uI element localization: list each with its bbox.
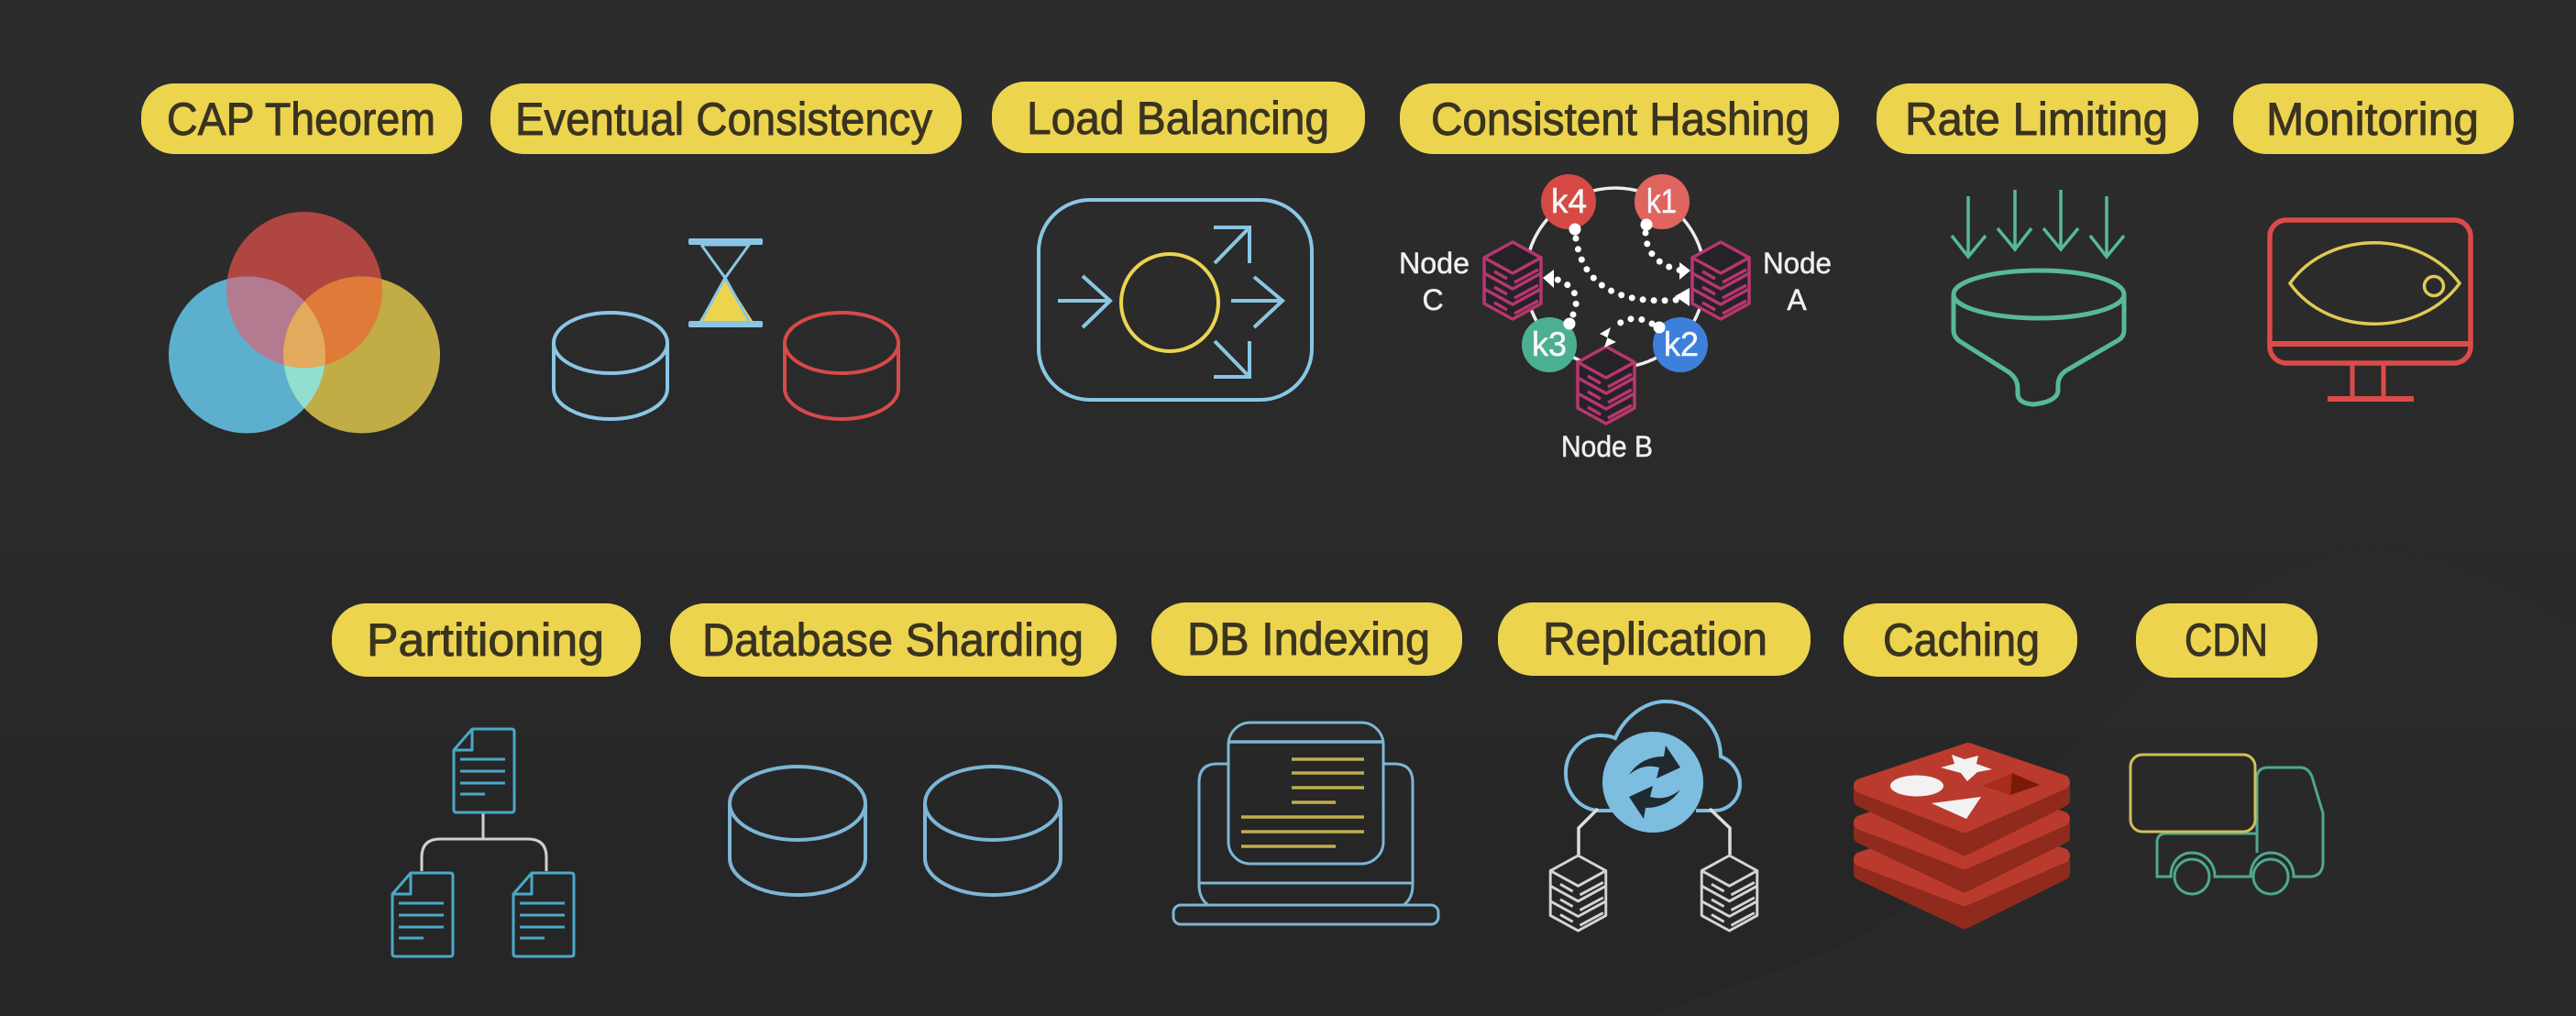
panel: Database Sharding	[670, 603, 1117, 895]
heading: Database Sharding: Database Sharding	[702, 614, 1084, 666]
panel: Caching	[1844, 603, 2077, 922]
icon: left server	[1550, 856, 1606, 931]
panel: Replication	[1498, 602, 1811, 931]
icon: two database shards	[730, 767, 1061, 895]
diagram: hash ring	[1399, 174, 1832, 463]
panel: Load Balancing	[992, 82, 1365, 400]
heading: DB Indexing	[1151, 602, 1462, 676]
icon: document tree	[392, 729, 574, 956]
server: Node B	[1578, 347, 1635, 424]
arrow: k4 to Node A	[1569, 224, 1690, 306]
panel: DB Indexing	[1151, 602, 1462, 924]
icon: load balancer	[1039, 200, 1312, 400]
icon: down arrows	[1952, 190, 2124, 257]
panel: Eventual Consistency	[490, 83, 962, 419]
key: k1	[1635, 174, 1690, 229]
heading: Consistent Hashing	[1400, 83, 1839, 154]
heading: Load Balancing: Load Balancing	[1027, 93, 1329, 144]
heading: Monitoring	[2233, 83, 2514, 154]
heading: Load Balancing	[992, 82, 1365, 153]
heading: CDN	[2136, 603, 2317, 678]
icon: hourglass	[688, 238, 763, 327]
heading: CDN: CDN	[2185, 614, 2268, 666]
arrow: k3 to Node C	[1543, 270, 1576, 330]
panel: CAP Theorem	[141, 83, 462, 433]
heading: Replication	[1498, 602, 1811, 676]
heading: CAP Theorem: CAP Theorem	[167, 94, 435, 145]
panel: Partitioning	[332, 603, 641, 956]
label: Node A: Node	[1763, 247, 1832, 280]
key: k2: k2	[1664, 326, 1699, 363]
server: Node C	[1484, 242, 1541, 319]
heading: Eventual Consistency: Eventual Consistency	[515, 94, 932, 145]
heading: Caching: Caching	[1883, 614, 2040, 666]
icon: monitor	[2270, 220, 2471, 402]
server: Node A	[1692, 242, 1749, 319]
heading: Rate Limiting: Rate Limiting	[1905, 94, 2168, 145]
arrow: k2 to Node B	[1600, 319, 1665, 348]
icon: delivery truck	[2130, 755, 2323, 894]
heading: Consistent Hashing: Consistent Hashing	[1431, 94, 1810, 145]
panel: Monitoring	[2233, 83, 2514, 402]
label: Node A: A	[1787, 283, 1807, 316]
icon: laptop with index	[1173, 723, 1438, 924]
icon: cloud sync	[1566, 701, 1740, 855]
key: k2	[1653, 317, 1708, 372]
heading: Caching	[1844, 603, 2077, 677]
heading: CAP Theorem	[141, 83, 462, 154]
panel: Rate Limiting	[1877, 83, 2198, 404]
icon: red database	[785, 313, 898, 419]
heading: Eventual Consistency	[490, 83, 962, 154]
key: k3: k3	[1532, 326, 1567, 363]
heading: Partitioning: Partitioning	[367, 614, 604, 666]
icon: funnel	[1954, 271, 2124, 404]
label: Node B: Node B	[1561, 430, 1653, 463]
label: Node C: Node	[1399, 247, 1470, 280]
key: k4: k4	[1551, 182, 1587, 220]
label: Node A	[1763, 247, 1832, 316]
icon: redis stack	[1861, 750, 2063, 922]
heading: Database Sharding	[670, 603, 1117, 677]
icon: eye	[2290, 243, 2460, 324]
heading: Monitoring: Monitoring	[2266, 94, 2479, 145]
heading: DB Indexing: DB Indexing	[1187, 613, 1430, 665]
panel: CDN	[2130, 603, 2323, 894]
label: Node C: C	[1422, 283, 1444, 316]
icon: right server	[1701, 856, 1757, 931]
key: k3	[1522, 317, 1577, 372]
key: k4	[1541, 174, 1596, 229]
panel: Consistent Hashing	[1399, 83, 1839, 463]
label: Node C	[1399, 247, 1470, 316]
icon: blue database	[554, 313, 667, 419]
heading: Replication: Replication	[1543, 613, 1767, 665]
heading: Rate Limiting	[1877, 83, 2198, 154]
heading: Partitioning	[332, 603, 641, 677]
arrow: k1 to Node A	[1641, 218, 1690, 280]
icon: venn diagram	[169, 212, 440, 433]
key: k1: k1	[1646, 182, 1677, 220]
